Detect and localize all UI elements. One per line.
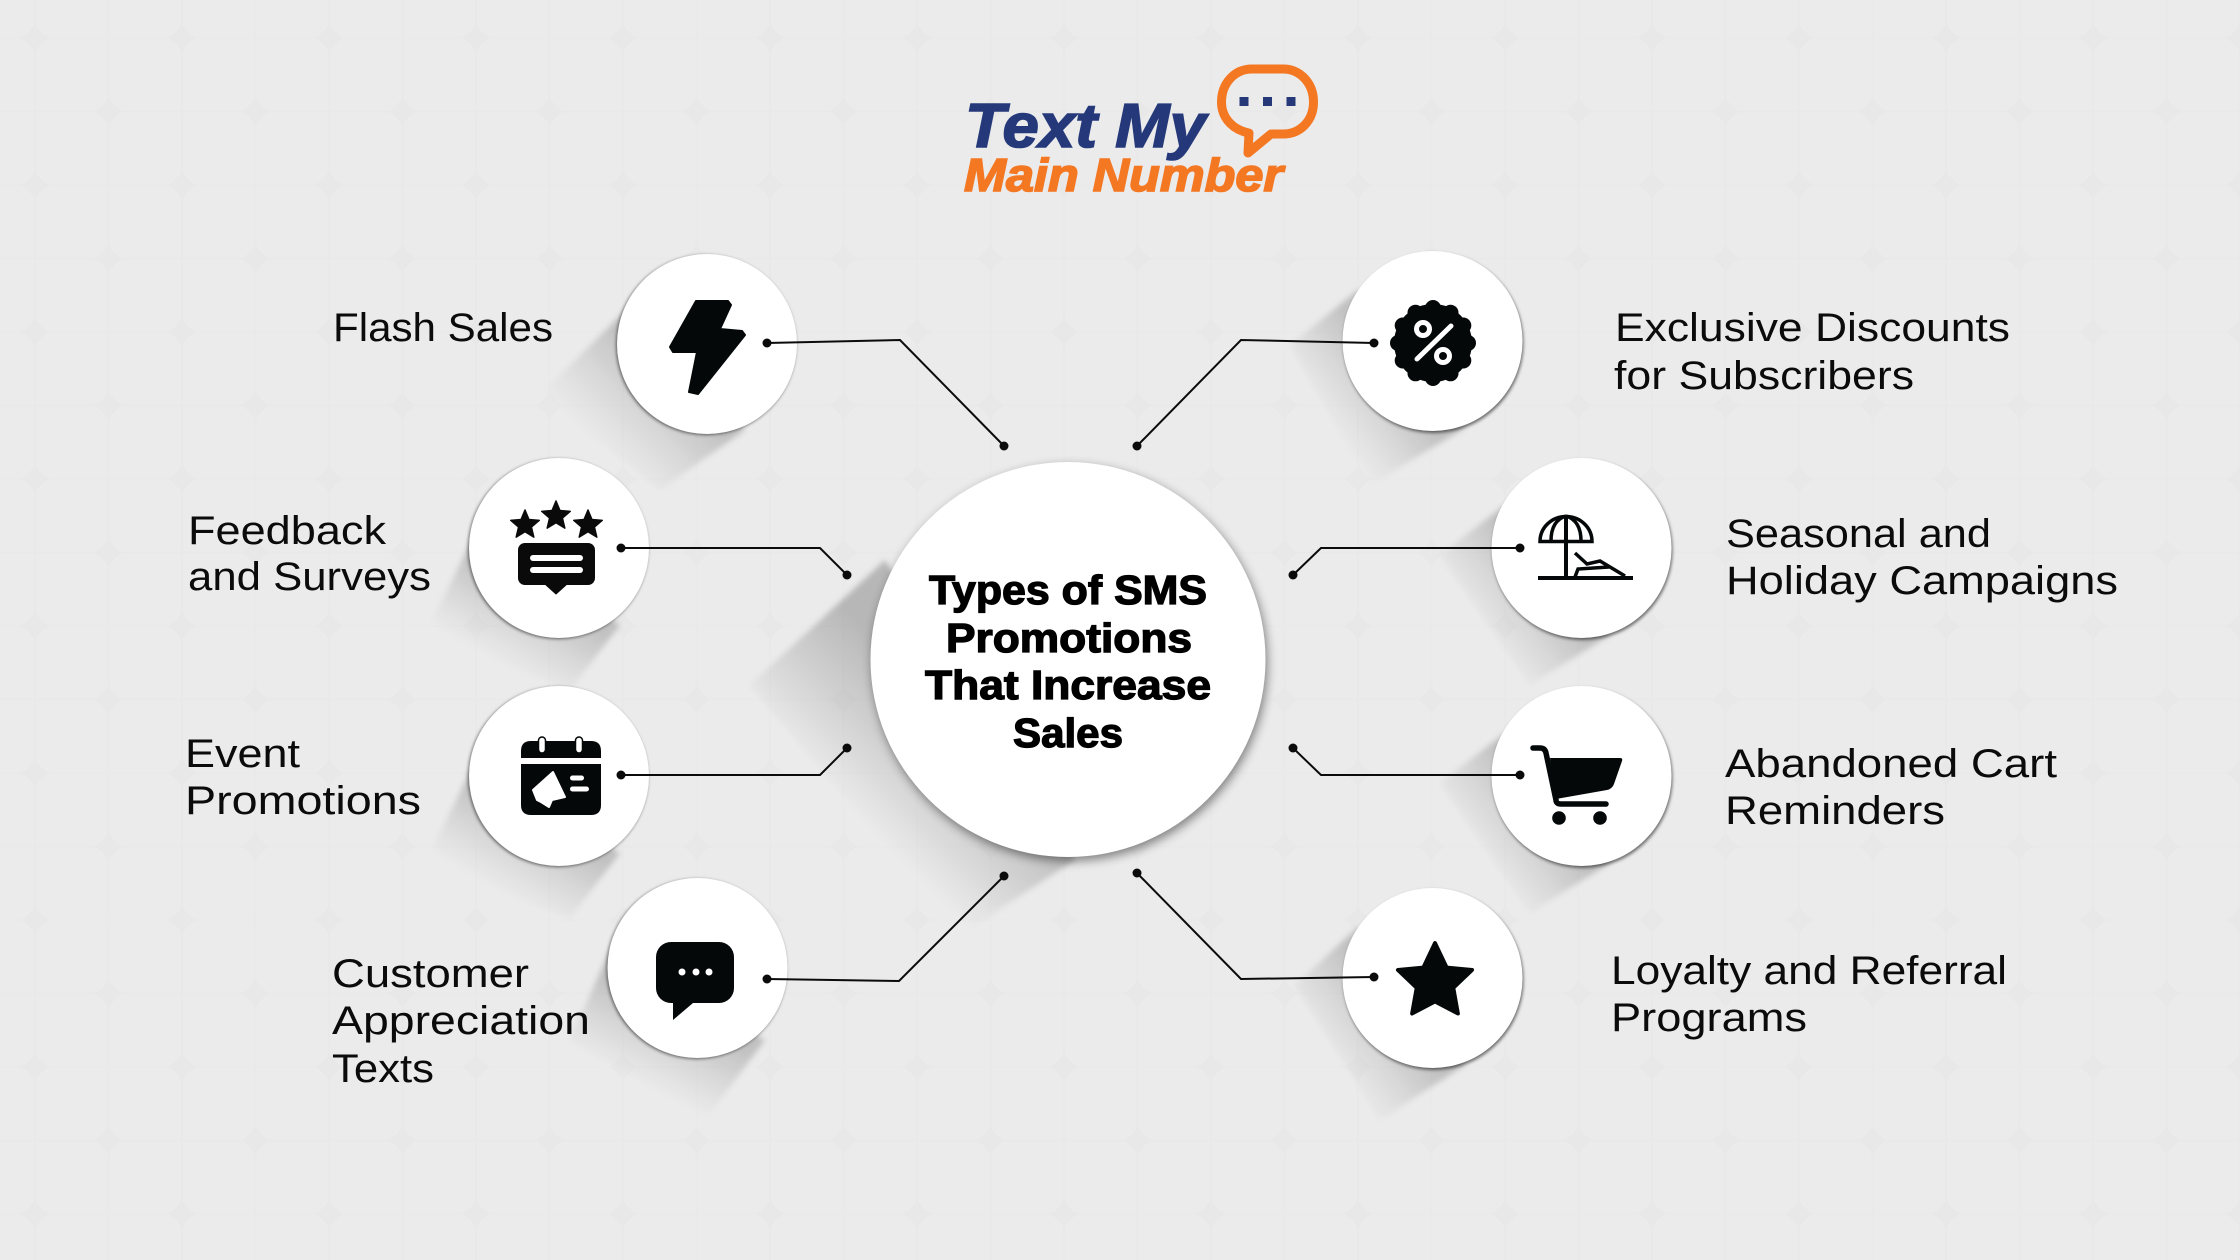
leader line: event [616, 744, 852, 780]
leader line: cart [1288, 744, 1524, 780]
panel: feedback and surveys [188, 458, 852, 638]
label: customer appreciation texts: Texts [332, 1047, 434, 1091]
icon: calendar megaphone [521, 737, 601, 815]
icon: percent badge [1390, 300, 1476, 386]
leader line: customer [762, 872, 1008, 984]
leader line: loyalty [1132, 868, 1378, 982]
panel: customer appreciation texts [332, 872, 1008, 1091]
label: feedback and surveys: and Surveys [188, 555, 431, 599]
label: seasonal and holiday campaigns [1726, 512, 2118, 603]
logo icon: speech bubble [1222, 69, 1314, 153]
label: exclusive discounts: Exclusive Discounts [1615, 306, 2010, 350]
panel: event promotions [185, 686, 852, 866]
label: customer appreciation texts: Customer [332, 952, 529, 996]
logo wordmark line 2: Main Number [964, 149, 1285, 201]
label: loyalty and referral programs [1611, 949, 2007, 1040]
label: loyalty and referral programs: Programs [1611, 996, 1807, 1040]
label: abandoned cart reminders [1725, 742, 2057, 833]
label: customer appreciation texts [332, 952, 590, 1091]
label: exclusive discounts: for Subscribers [1614, 354, 1914, 398]
icon: star [1398, 943, 1472, 1014]
label: feedback and surveys [188, 509, 431, 599]
panel: abandoned cart reminders [1288, 686, 2057, 866]
icon: chat bubble [656, 942, 734, 1020]
label: event promotions: Promotions [185, 779, 421, 823]
leader line: exclusive [1132, 338, 1378, 450]
panel: exclusive discounts [1132, 251, 2010, 450]
label: exclusive discounts [1614, 306, 2010, 398]
icon: shopping cart [1533, 748, 1622, 825]
leader line: seasonal [1288, 544, 1524, 580]
central heading: Types of SMS [929, 567, 1207, 613]
central heading: Sales [1013, 710, 1123, 756]
logo wordmark line 1: Text My [965, 92, 1210, 161]
central heading [925, 567, 1211, 756]
label: customer appreciation texts: Appreciation [332, 999, 590, 1043]
label: abandoned cart reminders: Reminders [1725, 789, 1945, 833]
panel: loyalty and referral programs [1132, 868, 2007, 1068]
panel: flash sales [333, 254, 1008, 450]
label: abandoned cart reminders: Abandoned Cart [1725, 742, 2057, 786]
label: seasonal and holiday campaigns: Holiday Campaigns [1726, 559, 2118, 603]
icon: stars and comment [511, 501, 602, 594]
label: seasonal and holiday campaigns: Seasonal and [1726, 512, 1991, 556]
label: event promotions [185, 732, 421, 823]
panel: seasonal and holiday campaigns [1288, 458, 2118, 638]
icon: beach umbrella and lounger [1538, 516, 1633, 578]
central circle [870, 462, 1266, 857]
label: loyalty and referral programs: Loyalty and Referral [1611, 949, 2007, 993]
label: feedback and surveys: Feedback [188, 509, 387, 553]
central heading: Promotions [946, 615, 1192, 661]
logo: Text My Main Number [964, 69, 1314, 201]
leader line: flash sales [762, 338, 1008, 450]
icon: lightning bolt [670, 301, 745, 394]
label: flash sales: Flash Sales [333, 306, 553, 350]
leader line: feedback [616, 544, 852, 580]
central heading: That Increase [925, 662, 1211, 708]
label: event promotions: Event [185, 732, 300, 776]
